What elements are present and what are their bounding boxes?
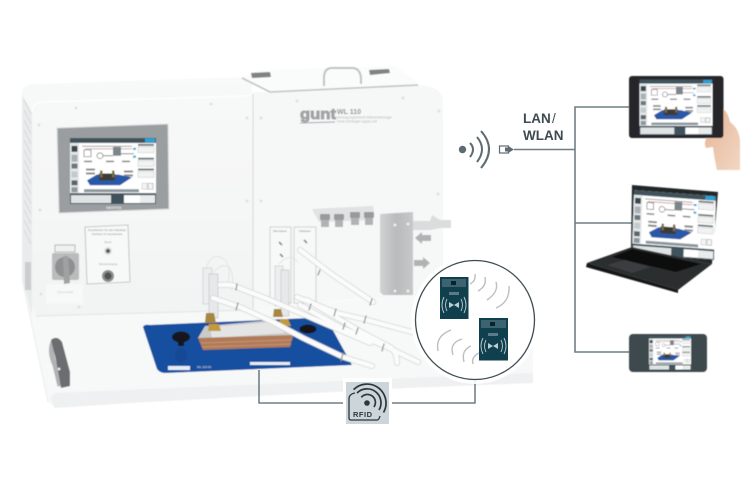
- gunt logo and type label: WL 110: [337, 109, 361, 116]
- phone screen: [649, 336, 691, 370]
- right cabinet: [253, 85, 443, 308]
- lid with handle and latches: [241, 66, 420, 92]
- black knobs: [172, 324, 316, 346]
- network connection lines: [514, 107, 632, 352]
- gunt logo and type label: [300, 106, 393, 124]
- laptop lid: [631, 185, 718, 264]
- base plate: [22, 279, 533, 408]
- touch panel with bezel: [57, 124, 169, 213]
- control label panel: Anschlüssen für das Kabelsatz: [88, 228, 127, 232]
- machine: WL 110 supply unit: [22, 66, 533, 408]
- radio waves lower: [438, 330, 479, 364]
- RFID connector lines: [259, 370, 475, 403]
- gunt logo and type label: Versorgungseinheit Wärmeübertrager: [337, 116, 393, 120]
- LAN plug icon: [500, 146, 514, 153]
- tablet body: [629, 76, 724, 138]
- smartphone: [629, 334, 707, 372]
- RFID callout circle: [411, 256, 539, 384]
- glass and brass connectors: [203, 256, 298, 331]
- laptop keyboard base: [587, 247, 712, 290]
- hose fitting rack: [312, 206, 374, 227]
- control label panel: Sensor: [104, 241, 112, 244]
- laptop: [586, 185, 718, 293]
- inlet and outlet label plates: [270, 227, 316, 303]
- main switch: [46, 245, 83, 304]
- gunt logo and type label: gunt: [300, 106, 336, 123]
- blue experiment mat: WL 110.03: [197, 365, 212, 369]
- control label panel: [85, 225, 130, 284]
- hand: [705, 108, 740, 170]
- plate heat exchanger unit: [380, 212, 451, 295]
- carrying handle: [51, 338, 70, 388]
- laptop screen: [632, 190, 716, 260]
- label: LAN/WLAN: /: [552, 111, 556, 126]
- radio waves upper: [470, 274, 509, 308]
- tablet screen: [640, 80, 712, 135]
- main switch: Typenschild: [57, 290, 73, 294]
- tablet held in hand: [629, 76, 740, 170]
- RFID card lower: [479, 318, 508, 360]
- RFID card upper: [440, 277, 468, 319]
- label: LAN/WLAN: LAN: [523, 111, 551, 126]
- plate heat exchanger on mat: [198, 320, 293, 350]
- touch panel with bezel: WEINTEK: [106, 206, 122, 210]
- wireless signal icon: [459, 131, 489, 168]
- phone body: [629, 334, 707, 372]
- label: LAN/WLAN: [523, 111, 564, 143]
- control label panel: Interface for accessories: [92, 232, 123, 236]
- inlet and outlet label plates: Kaltwasser: [299, 230, 311, 233]
- gunt logo and type label: Heat exchanger supply unit: [337, 120, 377, 124]
- label: LAN/WLAN: WLAN: [523, 128, 564, 143]
- left cabinet: [22, 77, 254, 316]
- RFID icon: [343, 378, 392, 427]
- RFID icon: RFID: [353, 410, 373, 419]
- control label panel: Stromversorgung: [99, 263, 118, 266]
- inlet and outlet label plates: Warmwasser: [273, 230, 287, 233]
- white hoses: [213, 250, 418, 366]
- blue experiment mat: [143, 318, 352, 373]
